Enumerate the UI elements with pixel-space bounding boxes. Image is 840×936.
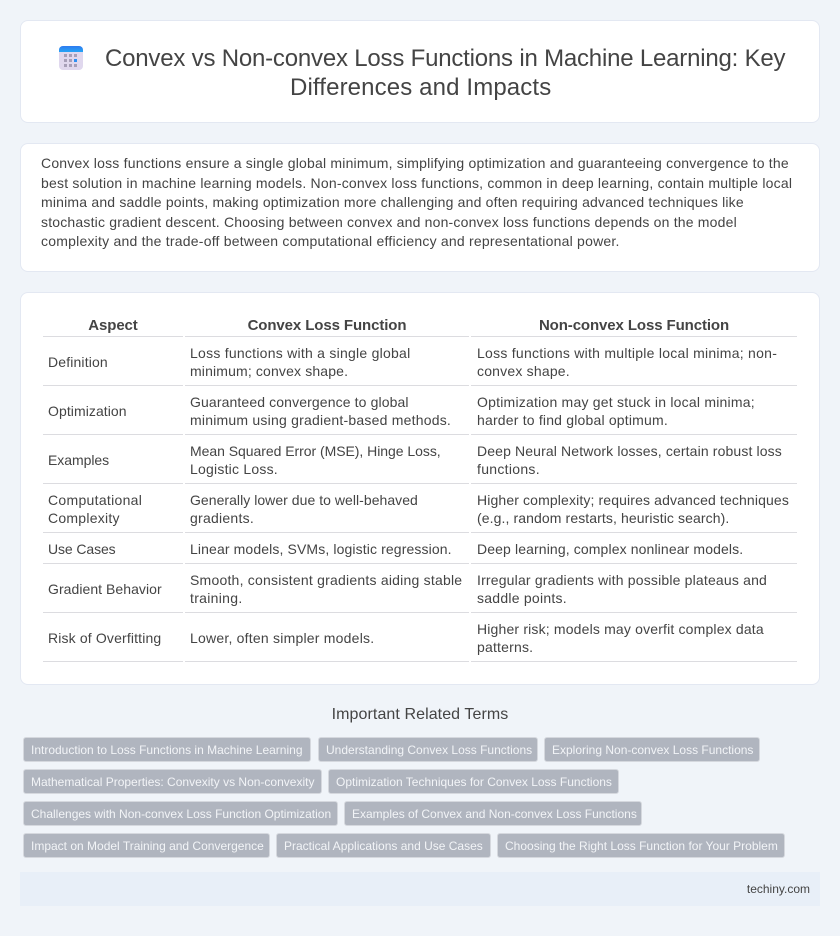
intro paragraph: complexity and the trade-off between computational efficiency and representational power.: [41, 233, 620, 249]
icon: calendar: [59, 46, 83, 70]
row: computational complexity: Computational: [48, 492, 142, 508]
intro paragraph: stochastic gradient descent. Choosing between convex and non-convex loss functions depends on the model: [41, 214, 737, 230]
row: risk of overfitting: Lower, often simpler models.: [190, 630, 374, 646]
related terms tags: Optimization Techniques for Convex Loss Functions: [336, 775, 612, 789]
row: examples: Mean Squared Error (MSE), Hinge Loss,: [190, 443, 441, 459]
row: examples: Examples: [48, 452, 109, 468]
row: gradient behavior: [48, 572, 767, 606]
footer: techiny.com: [747, 882, 810, 896]
row: definition: Loss functions with multiple local minima; non-: [477, 345, 777, 361]
related terms tags: Mathematical Properties: Convexity vs Non-convexity: [31, 775, 314, 789]
row: definition: [48, 345, 777, 379]
row: gradient behavior: Gradient Behavior: [48, 581, 162, 597]
row: optimization: minimum using gradient-based methods.: [190, 412, 451, 428]
row: optimization: Guaranteed convergence to global: [190, 394, 409, 410]
row: risk of overfitting: Risk of Overfitting: [48, 630, 161, 646]
panel: introduction text: [20, 143, 820, 272]
row: computational complexity: gradients.: [190, 510, 254, 526]
row: optimization: Optimization may get stuck in local minima;: [477, 394, 755, 410]
row: optimization: [48, 394, 755, 428]
title: Convex vs Non-convex Loss Functions in Machine Learning: Key: [105, 45, 785, 72]
row: use cases: [48, 541, 743, 557]
row: computational complexity: (e.g., random restarts, heuristic search).: [477, 510, 729, 526]
header card: [20, 20, 820, 123]
title: Differences and Impacts: [290, 74, 551, 101]
intro paragraph: best solution in machine learning models. Non-convex loss functions, common in deep learning, contain multiple local: [41, 174, 792, 190]
row: risk of overfitting: Higher risk; models may overfit complex data: [477, 621, 764, 637]
row: gradient behavior: Smooth, consistent gradients aiding stable: [190, 572, 462, 588]
row: risk of overfitting: [48, 621, 764, 655]
intro paragraph: Convex loss functions ensure a single global minimum, simplifying optimization and guaranteeing convergence to the: [41, 155, 789, 171]
row: optimization: harder to find global optimum.: [477, 412, 668, 428]
related terms tags: Practical Applications and Use Cases: [284, 839, 483, 853]
related terms tags: Understanding Convex Loss Functions: [326, 743, 532, 757]
heading: important related terms: Important Related Terms: [332, 706, 508, 723]
row: computational complexity: Generally lower due to well-behaved: [190, 492, 418, 508]
related terms tags: Challenges with Non-convex Loss Function Optimization: [31, 807, 331, 821]
related terms tags: Impact on Model Training and Convergence: [31, 839, 264, 853]
row: computational complexity: Higher complexity; requires advanced techniques: [477, 492, 789, 508]
panel: comparison table: [20, 292, 820, 685]
table header: Convex Loss Function: [248, 317, 406, 334]
related terms tags: Choosing the Right Loss Function for Your Problem: [505, 839, 778, 853]
title: [105, 45, 786, 101]
row: examples: Logistic Loss.: [190, 461, 278, 477]
row: definition: Definition: [48, 354, 108, 370]
related terms tags: [23, 737, 785, 858]
row: examples: Deep Neural Network losses, certain robust loss: [477, 443, 782, 459]
intro paragraph: minima and saddle points, making optimization more challenging and often requiring advanced techniques like: [41, 194, 744, 210]
row: computational complexity: Complexity: [48, 510, 120, 526]
row: definition: convex shape.: [477, 363, 570, 379]
footer: [20, 872, 820, 906]
row: gradient behavior: training.: [190, 590, 243, 606]
row: examples: functions.: [477, 461, 540, 477]
table header: [88, 317, 729, 334]
related terms tags: Exploring Non-convex Loss Functions: [552, 743, 753, 757]
row: gradient behavior: saddle points.: [477, 590, 567, 606]
row: use cases: Deep learning, complex nonlinear models.: [477, 541, 743, 557]
row: risk of overfitting: patterns.: [477, 639, 533, 655]
row: definition: minimum; convex shape.: [190, 363, 348, 379]
row: gradient behavior: Irregular gradients with possible plateaus and: [477, 572, 767, 588]
row: optimization: Optimization: [48, 403, 127, 419]
table header: Aspect: [88, 317, 138, 334]
comparison table: [43, 317, 797, 662]
related terms tags: Introduction to Loss Functions in Machine Learning: [31, 743, 302, 757]
row: use cases: Linear models, SVMs, logistic regression.: [190, 541, 452, 557]
row: definition: Loss functions with a single global: [190, 345, 410, 361]
table header: Non-convex Loss Function: [539, 317, 729, 334]
row: computational complexity: [48, 492, 789, 526]
row: use cases: Use Cases: [48, 541, 116, 557]
intro paragraph: [41, 155, 792, 249]
related terms tags: Examples of Convex and Non-convex Loss Functions: [352, 807, 637, 821]
row: examples: [48, 443, 782, 477]
